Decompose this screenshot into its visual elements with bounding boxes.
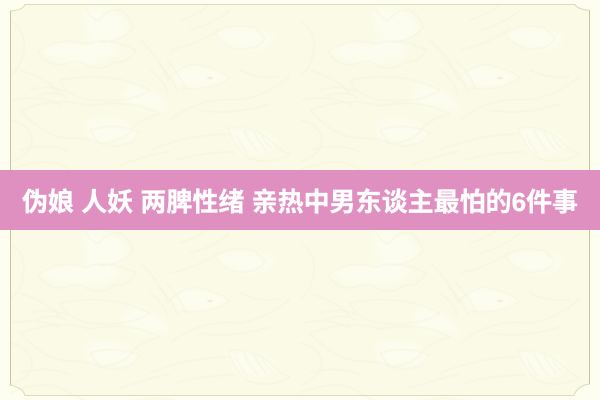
title band <box>0 170 600 230</box>
title: 伪娘 人妖 两脾性绪 亲热中男东谈主最怕的6件事 <box>22 187 578 217</box>
